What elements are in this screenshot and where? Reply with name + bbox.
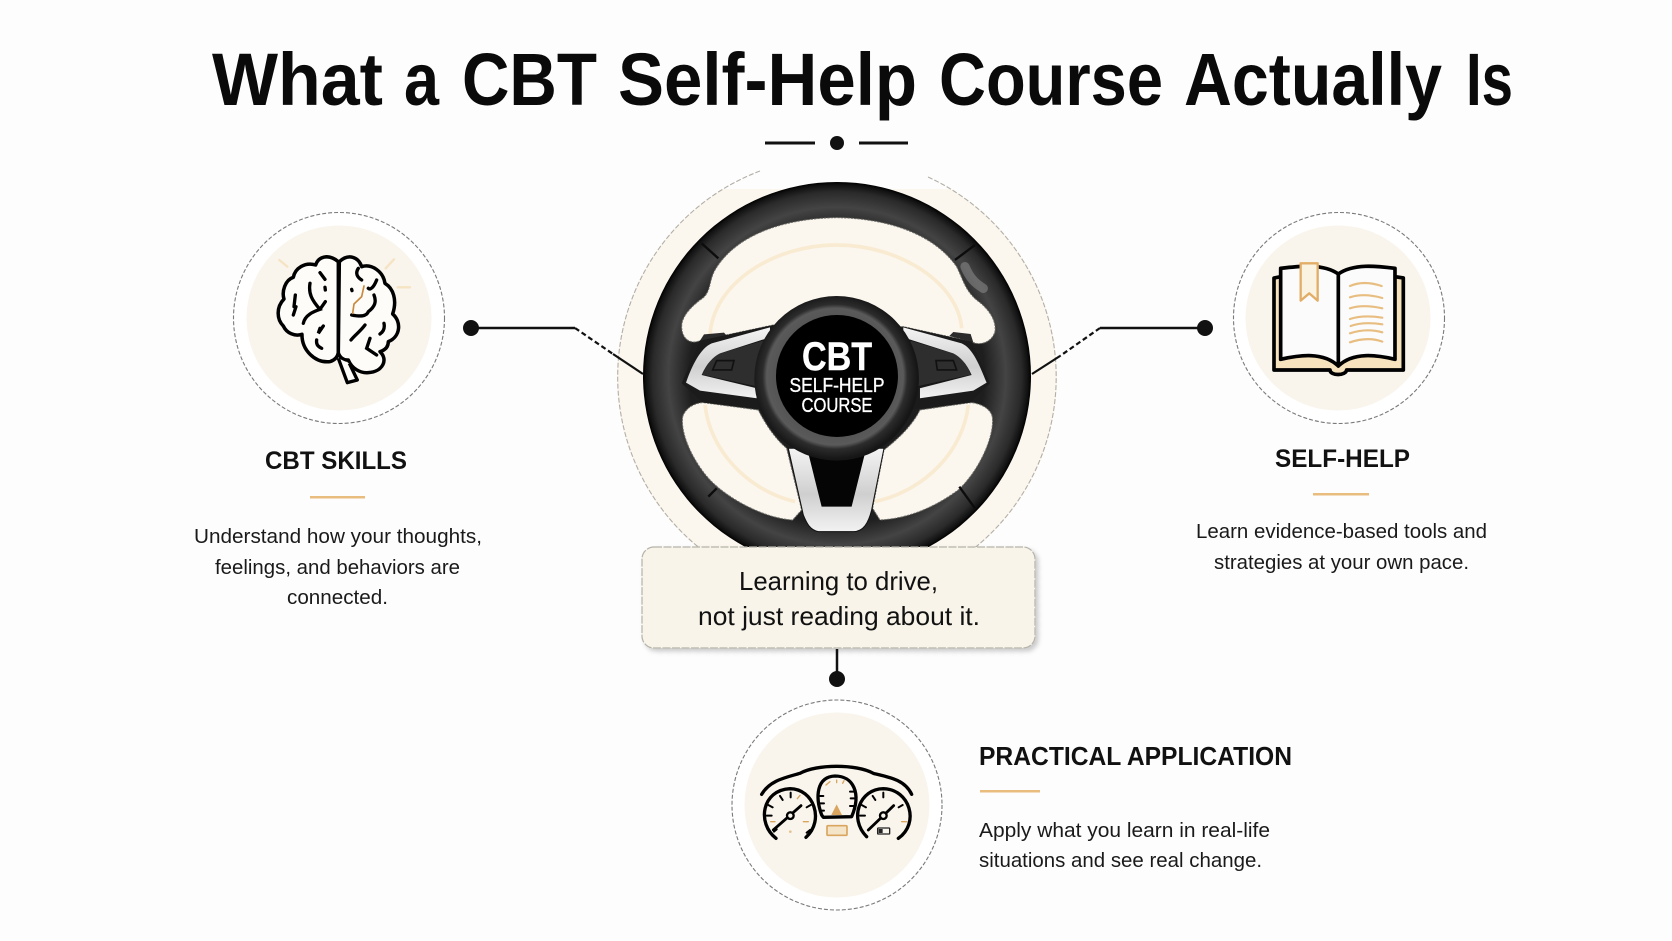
callout — [642, 547, 1035, 648]
title: Self-Help — [618, 38, 917, 121]
dashed backdrop arc — [618, 171, 1056, 550]
title: a — [404, 38, 440, 121]
connector: bottom — [829, 649, 845, 687]
description: Learn evidence-based tools and — [1196, 520, 1487, 543]
cream backdrop disc — [617, 189, 1057, 547]
title ornament — [765, 136, 908, 150]
button panel: left — [702, 340, 763, 388]
button panel: right — [910, 340, 972, 388]
hole: top — [682, 218, 995, 344]
hole: lower right — [873, 403, 993, 520]
hole: lower left — [682, 403, 802, 520]
spoke: right — [893, 327, 990, 412]
callout: Learning to drive, — [739, 566, 938, 596]
connector: right — [1032, 320, 1213, 374]
panel: CBT skills — [194, 212, 482, 609]
spoke: left — [682, 325, 780, 412]
icon: dashboard gauges — [732, 700, 942, 910]
description — [1196, 520, 1487, 574]
description: connected. — [287, 586, 388, 609]
underline — [980, 790, 1040, 792]
description: feelings, and behaviors are — [215, 556, 460, 579]
wheel rim — [643, 182, 1031, 570]
panel: self-help — [1196, 212, 1487, 574]
description: Understand how your thoughts, — [194, 525, 482, 548]
panel: practical application — [732, 700, 1292, 910]
title: Is — [1466, 38, 1513, 121]
title: What — [212, 38, 383, 121]
hub — [754, 296, 919, 461]
heading: PRACTICAL APPLICATION — [979, 741, 1292, 771]
description — [194, 525, 482, 609]
hub label — [790, 335, 884, 417]
hub label: COURSE — [802, 395, 872, 417]
spoke: bottom — [788, 448, 884, 532]
central steering wheel — [617, 170, 1057, 547]
callout: not just reading about it. — [698, 601, 980, 631]
description — [979, 819, 1270, 872]
chrome trim: right — [903, 327, 987, 398]
chrome trim: left — [686, 327, 770, 398]
rim highlight — [965, 267, 983, 288]
hub label: CBT — [802, 335, 872, 379]
title: Actually — [1184, 38, 1442, 121]
title: Course — [939, 38, 1163, 121]
heading: CBT SKILLS — [265, 447, 407, 475]
description: Apply what you learn in real-life — [979, 819, 1270, 842]
orange ring visible through holes — [710, 245, 962, 335]
hub label: SELF-HELP — [790, 375, 884, 397]
rim segment seams — [702, 243, 975, 508]
underline — [310, 496, 365, 498]
underline — [1313, 493, 1369, 496]
title — [212, 38, 1513, 121]
description: strategies at your own pace. — [1214, 551, 1469, 574]
wheel body — [682, 218, 995, 532]
description: situations and see real change. — [979, 849, 1262, 872]
heading: SELF-HELP — [1275, 445, 1410, 473]
connector: left — [463, 320, 643, 374]
icon: brain — [234, 212, 444, 424]
paddles — [700, 332, 973, 342]
icon: open book — [1234, 212, 1444, 424]
title: CBT — [462, 38, 597, 121]
